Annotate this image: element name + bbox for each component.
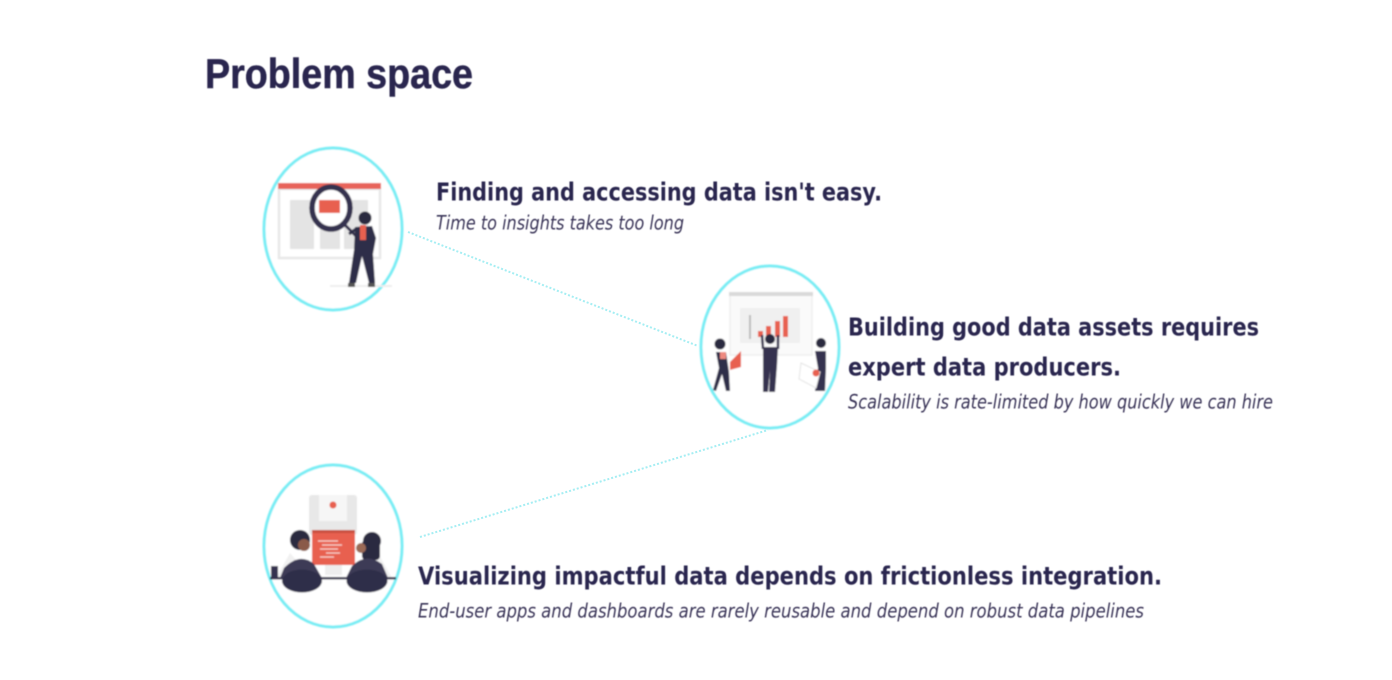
connector: finding to building (408, 232, 698, 346)
icon: search illustration (264, 148, 402, 310)
icon: team with chart illustration (701, 266, 839, 428)
text block: finding data (436, 178, 882, 234)
text block: finding data: Finding and accessing data isn't easy. (436, 178, 882, 206)
text block: building data assets: Scalability is rate-limited by how quickly we can hire (848, 390, 1273, 414)
title: Problem space (205, 50, 473, 97)
connector: visualizing to building (420, 430, 768, 537)
icon: two people at monitor illustration (264, 465, 402, 627)
text block: visualizing data (418, 562, 1162, 622)
text block: visualizing data: End-user apps and dashboards are rarely reusable and depend on robust data pipelines (418, 600, 1144, 622)
text block: building data assets: expert data producers. (848, 352, 1121, 382)
text block: building data assets: Building good data assets requires (848, 312, 1259, 342)
text block: finding data: Time to insights takes too long (436, 212, 684, 234)
text block: building data assets (848, 312, 1273, 414)
text block: visualizing data: Visualizing impactful data depends on frictionless integration. (418, 562, 1162, 590)
